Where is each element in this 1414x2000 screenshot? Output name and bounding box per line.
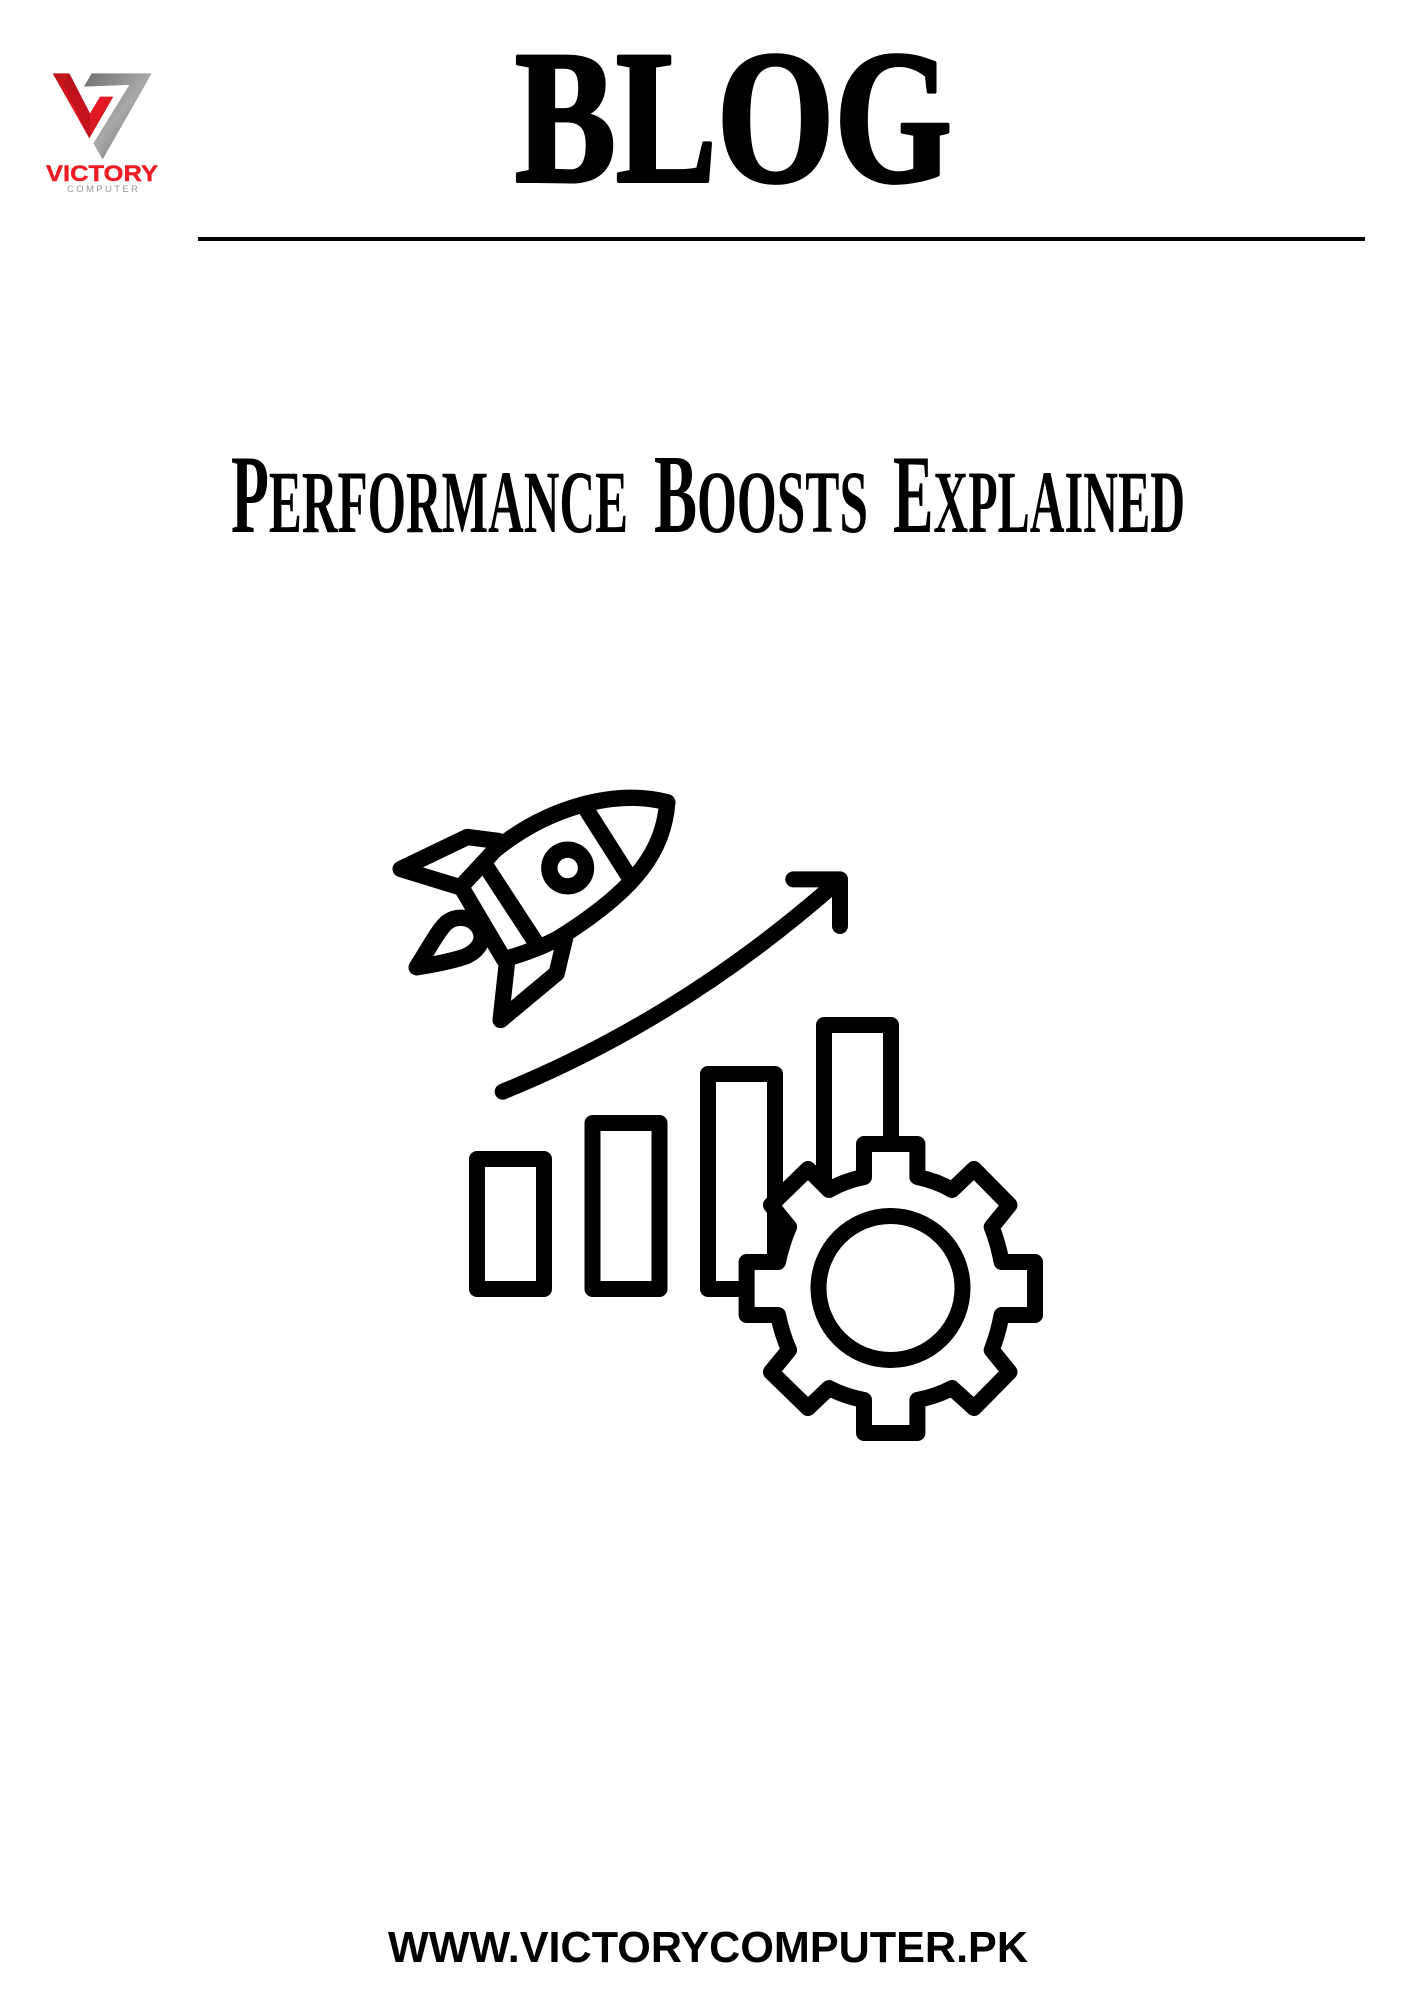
icon: gear (747, 1144, 1035, 1433)
bar 3 (708, 1074, 775, 1289)
illustration: rocket, growth arrow, bars and gear (401, 798, 1035, 1433)
icon: rocket (401, 798, 667, 1020)
bar 2 (592, 1123, 660, 1289)
logo wordmark: VICTORY: VICTORY (46, 161, 158, 186)
bar 4 (824, 1025, 891, 1225)
logo: Victory Computer (46, 73, 158, 195)
icon: gray 7 mark (84, 73, 152, 159)
header rule (198, 237, 1365, 241)
arrow: growth (503, 879, 840, 1092)
rocket nose divider (587, 811, 627, 874)
icon: red V mark (53, 73, 113, 138)
title: Performance Boosts Explained: BOOSTS (654, 433, 868, 557)
bar 1 (477, 1159, 544, 1289)
rocket body (461, 798, 667, 959)
logo wordmark: COMPUTER: COMPUTER (67, 184, 138, 195)
rocket flame (417, 918, 482, 967)
bar chart icon (477, 1025, 891, 1289)
title: Performance Boosts Explained: PERFORMANCE (231, 433, 628, 557)
rocket lower fin (501, 938, 565, 1020)
heading: BLOG: BLOG (515, 13, 952, 223)
rocket window (549, 850, 586, 886)
rocket left fin (401, 837, 498, 887)
rocket band divider (487, 868, 536, 942)
title: Performance Boosts Explained: EXPLAINED (893, 433, 1185, 557)
footer: website URL: WWW.VICTORYCOMPUTER.PK (388, 1923, 1028, 1972)
